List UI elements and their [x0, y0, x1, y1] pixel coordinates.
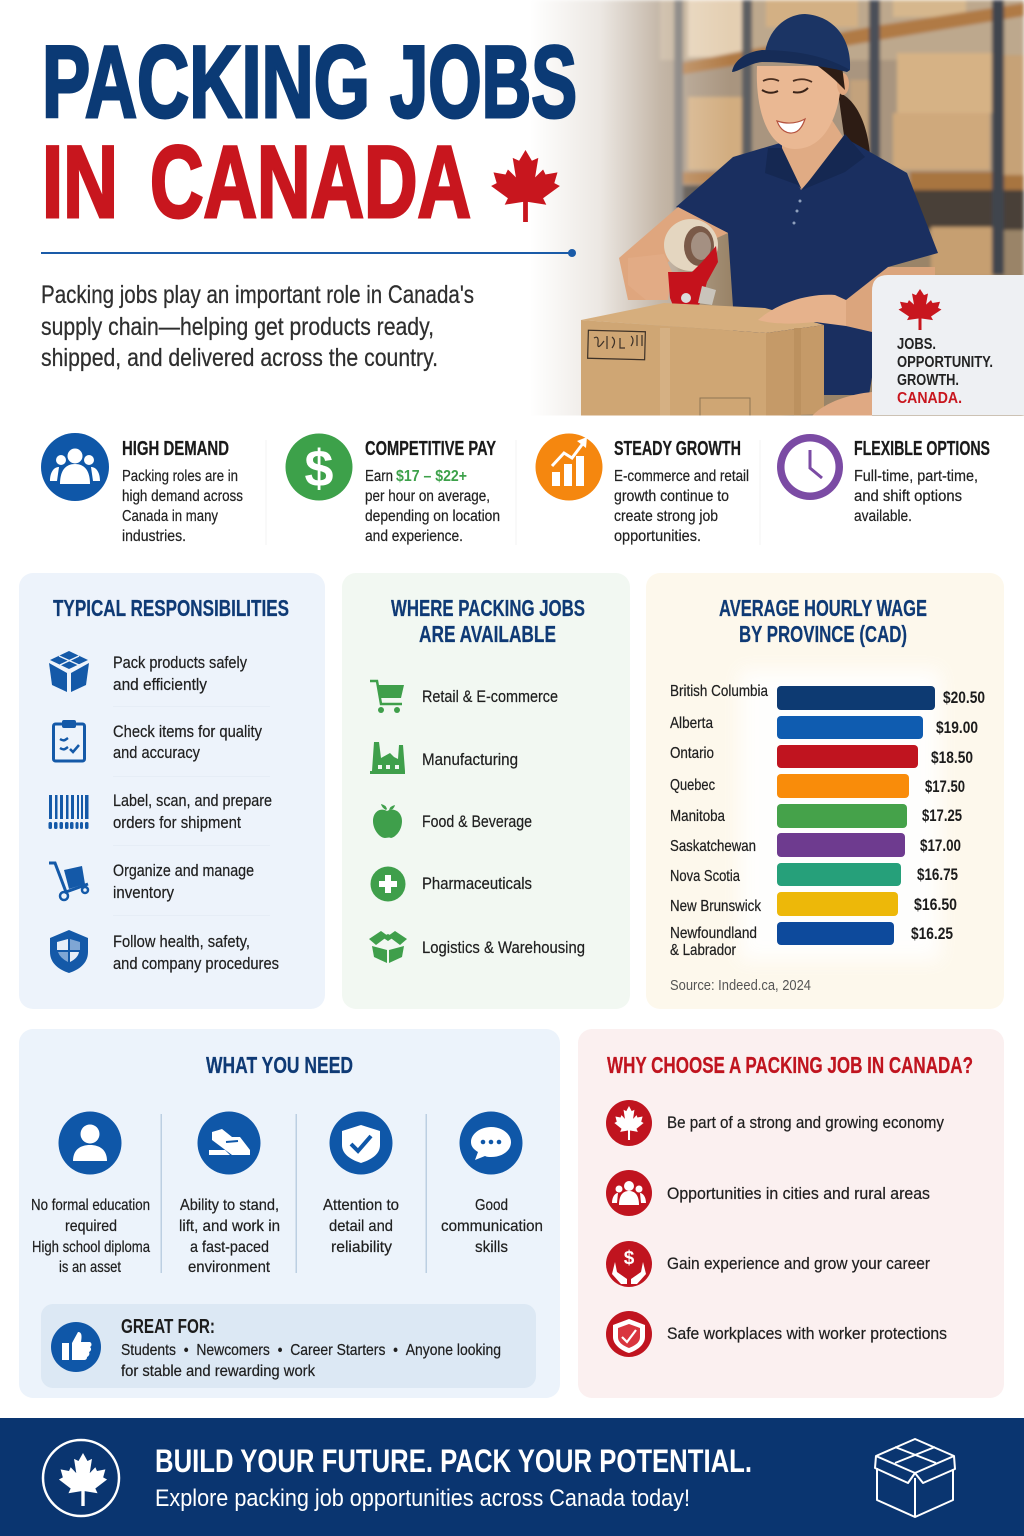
- stat: competitive pay: $17 – $22+: [396, 468, 467, 485]
- stat: flexible options: and shift options: [854, 488, 962, 505]
- hero photo: packer in warehouse: [550, 0, 1024, 416]
- bar chart: Ontario: [670, 745, 714, 762]
- list text: Organize and manage: [113, 861, 254, 880]
- ponytail: [839, 94, 870, 152]
- heading: WHERE PACKING JOBS: [391, 595, 585, 621]
- panel: what you need: [19, 1029, 560, 1398]
- heading: TYPICAL RESPONSIBILITIES: [53, 595, 289, 621]
- list text: and accuracy: [113, 743, 200, 762]
- list text: Retail & E-commerce: [422, 687, 558, 706]
- stat: steady growth: STEADY GROWTH: [614, 438, 741, 460]
- polo shirt torso: [676, 135, 938, 395]
- stat: steady growth: create strong job: [614, 508, 718, 525]
- neck and face: [782, 120, 845, 190]
- stat: high demand: Packing roles are in: [122, 468, 238, 485]
- bar chart: $17.00: [920, 837, 961, 855]
- requirement text: Good: [475, 1197, 508, 1214]
- list text: Pharmaceuticals: [422, 874, 532, 893]
- right forearm: [846, 267, 935, 332]
- requirement text: Ability to stand,: [180, 1197, 279, 1214]
- hero badge: [872, 275, 1024, 415]
- bar chart: & Labrador: [670, 942, 737, 959]
- bar chart: $20.50: [943, 689, 985, 707]
- bar chart: $16.50: [914, 896, 957, 914]
- stat: high demand: Canada in many: [122, 508, 218, 525]
- intro paragraph: supply chain—helping get products ready,: [41, 313, 434, 341]
- heading: ARE AVAILABLE: [419, 621, 556, 647]
- stat: flexible options: available.: [854, 508, 912, 525]
- requirement text: communication: [441, 1218, 543, 1235]
- icon: maple leaf ring: [43, 1440, 119, 1516]
- requirement text: a fast-paced: [190, 1239, 269, 1256]
- footer text: [155, 1443, 752, 1512]
- hero badge: GROWTH.: [897, 372, 959, 389]
- list text: orders for shipment: [113, 813, 241, 832]
- icon: medical cross: [370, 866, 406, 902]
- bar chart: $17.50: [925, 778, 965, 796]
- requirement text: environment: [188, 1259, 271, 1276]
- icon: package: [49, 651, 89, 692]
- title: [42, 25, 577, 239]
- icon: maple leaf: [606, 1100, 652, 1146]
- stat: competitive pay: Earn: [365, 468, 393, 485]
- bar chart: British Columbia: [670, 683, 768, 700]
- requirement text: High school diploma: [32, 1239, 150, 1256]
- stat: steady growth: [536, 434, 749, 545]
- icon: hands with dollar: $: [624, 1248, 635, 1269]
- stat: steady growth: E-commerce and retail: [614, 468, 749, 485]
- requirement text: No formal education: [31, 1197, 150, 1214]
- icon: factory: [370, 742, 405, 774]
- stat: steady growth: growth continue to: [614, 488, 729, 505]
- bar chart: $16.75: [917, 866, 958, 884]
- title divider line: [41, 249, 576, 257]
- bar chart: New Brunswick: [670, 898, 762, 915]
- footer banner: [0, 1418, 1024, 1536]
- requirement text: is an asset: [59, 1259, 121, 1276]
- bar chart: Nova Scotia: [670, 868, 740, 885]
- panel: average hourly wage: [646, 573, 1004, 1009]
- stat: high demand: HIGH DEMAND: [122, 438, 229, 460]
- footer text: Explore packing job opportunities across Canada today!: [155, 1485, 690, 1512]
- heading: [391, 595, 585, 647]
- callout: great for: GREAT FOR:: [121, 1316, 215, 1338]
- list text: Follow health, safety,: [113, 932, 250, 951]
- title: IN: [42, 125, 118, 239]
- white fade over photo: [498, 0, 720, 416]
- stat: competitive pay: $: [305, 440, 334, 498]
- heading: AVERAGE HOURLY WAGE: [719, 595, 927, 621]
- stat: flexible options: [777, 434, 990, 525]
- stat: competitive pay: depending on location: [365, 508, 500, 525]
- requirement text: required: [65, 1218, 117, 1235]
- panel: where packing jobs are available: [342, 573, 630, 1009]
- list text: [422, 687, 585, 957]
- list text: Safe workplaces with worker protections: [667, 1324, 947, 1343]
- list text: Label, scan, and prepare: [113, 791, 272, 810]
- stat: competitive pay: per hour on average,: [365, 488, 490, 505]
- stat: high demand: industries.: [122, 528, 186, 545]
- list text: [667, 1113, 947, 1343]
- footer text: BUILD YOUR FUTURE. PACK YOUR POTENTIAL.: [155, 1443, 752, 1479]
- callout: great for: [41, 1304, 536, 1388]
- callout: great for: for stable and rewarding work: [121, 1363, 316, 1380]
- bar chart: [670, 683, 985, 959]
- intro paragraph: shipped, and delivered across the country.: [41, 344, 438, 372]
- heading: WHAT YOU NEED: [206, 1052, 353, 1078]
- stat: competitive pay: COMPETITIVE PAY: [365, 438, 496, 460]
- icon: open box: [369, 931, 407, 963]
- stat: competitive pay: [286, 434, 500, 545]
- stat: high demand: high demand across: [122, 488, 243, 505]
- requirement text: [31, 1197, 543, 1276]
- icon: community: [606, 1170, 652, 1216]
- hero badge: OPPORTUNITY.: [897, 354, 993, 371]
- cap: [765, 14, 850, 70]
- bar chart: Manitoba: [670, 808, 725, 825]
- requirement text: Attention to: [323, 1197, 399, 1214]
- bar chart: $19.00: [936, 719, 978, 737]
- icon: clipboard: [54, 720, 84, 761]
- icon: hands with dollar: [606, 1241, 652, 1287]
- bar chart: $18.50: [931, 749, 973, 767]
- bar chart: Alberta: [670, 715, 713, 732]
- list text: Logistics & Warehousing: [422, 938, 585, 957]
- hero badge: CANADA.: [897, 390, 962, 407]
- intro paragraph: Packing jobs play an important role in Canada's: [41, 281, 474, 309]
- heading: [719, 595, 927, 647]
- intro paragraph: [41, 281, 474, 372]
- callout: great for: Students • Newcomers • Career Starters • Anyone looking: [121, 1342, 501, 1359]
- requirement text: detail and: [329, 1218, 393, 1235]
- lower hand: [812, 392, 872, 416]
- requirement text: skills: [475, 1239, 508, 1256]
- bar chart: Newfoundland: [670, 925, 757, 942]
- requirement text: lift, and work in: [179, 1218, 280, 1235]
- icon: cart: [370, 681, 404, 713]
- title: PACKING: [42, 25, 370, 139]
- icon: shield: [606, 1311, 652, 1357]
- icon: open box outline: [875, 1439, 955, 1517]
- hand on tape: [668, 264, 672, 299]
- icon: shield check: [330, 1112, 392, 1174]
- collar: [765, 134, 865, 190]
- icon: title maple leaf: [491, 150, 560, 222]
- stat: steady growth: opportunities.: [614, 528, 701, 545]
- list text: Check items for quality: [113, 722, 262, 741]
- list text: and efficiently: [113, 675, 207, 694]
- cardboard box: [581, 303, 824, 416]
- icon: shield: [50, 930, 88, 973]
- warehouse shelves background: [550, 0, 1024, 416]
- list text: Gain experience and grow your career: [667, 1254, 930, 1273]
- icon: person: [58, 1112, 122, 1174]
- left arm: [619, 207, 728, 300]
- tape dispenser: [664, 219, 718, 313]
- panel: typical responsibilities: [19, 573, 325, 1009]
- stats row: [41, 433, 990, 545]
- right hand on box: [758, 295, 846, 326]
- bar chart: $17.25: [922, 807, 962, 825]
- hero badge: JOBS.: [897, 336, 936, 353]
- title: CANADA: [150, 125, 471, 239]
- list text: Food & Beverage: [422, 812, 532, 831]
- icon: work shoe: [198, 1112, 260, 1174]
- list text: Manufacturing: [422, 750, 518, 769]
- list text: Be part of a strong and growing economy: [667, 1113, 944, 1132]
- stat: competitive pay: and experience.: [365, 528, 463, 545]
- title: JOBS: [390, 25, 577, 139]
- panel: why choose a packing job: [578, 1029, 1004, 1398]
- icon: badge maple leaf: [898, 289, 942, 330]
- requirement text: reliability: [331, 1239, 392, 1256]
- bar chart: Quebec: [670, 777, 715, 794]
- icon: hand truck: [49, 863, 88, 900]
- icon: chat bubble: [460, 1112, 522, 1174]
- list text: [113, 653, 279, 973]
- heading: BY PROVINCE (CAD): [739, 621, 907, 647]
- list text: inventory: [113, 883, 174, 902]
- icon: apple: [373, 804, 402, 838]
- bar chart: $16.25: [911, 925, 953, 943]
- icon: barcode: [48, 795, 88, 829]
- list text: Pack products safely: [113, 653, 247, 672]
- bar chart: Saskatchewan: [670, 838, 756, 855]
- stat: flexible options: Full-time, part-time,: [854, 468, 978, 485]
- stat: high demand: [41, 433, 243, 545]
- chart source: Source: Indeed.ca, 2024: [670, 978, 811, 994]
- list text: Opportunities in cities and rural areas: [667, 1184, 930, 1203]
- list text: and company procedures: [113, 954, 279, 973]
